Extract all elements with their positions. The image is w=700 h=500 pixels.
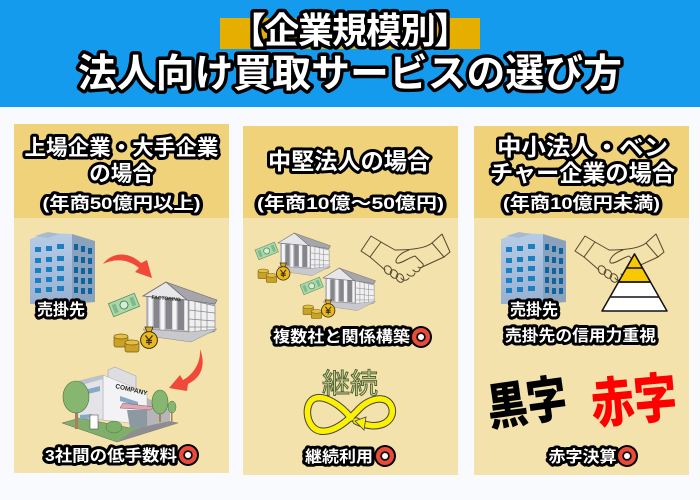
icon: double circle xyxy=(374,445,396,467)
panel heading text: 中堅法人の場合 xyxy=(268,148,430,174)
label: build relationships: 複数社と関係構築 xyxy=(273,327,410,346)
panel heading text: (年商10億〜50億円) xyxy=(257,193,444,213)
label: emphasis on client credit: 売掛先の信用力重視 xyxy=(505,326,656,345)
handwritten word: continuation: 継続 xyxy=(322,368,378,399)
icon: banknote xyxy=(108,293,140,317)
icon: factoring bank: FACTORING xyxy=(151,295,181,303)
icon: money bag xyxy=(141,327,157,348)
panel heading text xyxy=(490,134,675,213)
panel heading text: (年商50億円以上) xyxy=(42,193,200,213)
panel heading text: の場合 xyxy=(89,162,154,186)
panel heading text xyxy=(257,148,444,213)
label: continuous use: 継続利用 xyxy=(305,448,373,466)
arrow: to client company xyxy=(169,349,203,391)
illustration: company building xyxy=(62,367,178,442)
icon: infinity arrow xyxy=(307,398,392,431)
text art: profit: 黒字 xyxy=(484,370,571,437)
title line 2: 法人向け買取サービスの選び方 xyxy=(78,53,622,96)
panel heading text: (年商10億円未満) xyxy=(503,193,660,213)
illustration: company building: COMPANY xyxy=(115,383,149,397)
icon: factoring banks with money xyxy=(255,233,376,318)
label: client: 売掛先 xyxy=(510,300,558,319)
panel heading text: 上場企業・大手企業 xyxy=(24,136,218,160)
panel heading text: 中小法人・ベン xyxy=(497,134,668,160)
trees xyxy=(63,381,176,433)
icon: handshake xyxy=(361,234,450,284)
label: client: 売掛先 xyxy=(37,300,85,319)
panel: large enterprises xyxy=(14,124,229,473)
icon: coins xyxy=(114,334,139,352)
icon: double circle xyxy=(177,444,199,466)
panel heading band xyxy=(243,126,458,218)
panel heading band xyxy=(14,124,229,218)
header band xyxy=(0,0,700,107)
label: deficit accounts: 赤字決算 xyxy=(548,447,616,466)
panel heading band xyxy=(474,126,689,218)
panel: small and startup companies xyxy=(474,126,689,475)
icon: double circle xyxy=(616,445,638,467)
arrow: to factoring company xyxy=(103,254,152,278)
icon: double circle xyxy=(410,326,432,348)
icon: handshake xyxy=(575,234,664,284)
panel heading text xyxy=(24,136,218,213)
panel: mid-size companies xyxy=(243,126,458,475)
icon: client building xyxy=(501,232,566,304)
heading highlight xyxy=(220,18,480,49)
text art: deficit: 赤字 xyxy=(589,369,680,436)
label: low fee with factoring: 3社間の低手数料 xyxy=(45,446,177,465)
panel heading text: チャー企業の場合 xyxy=(490,160,675,186)
icon: credit pyramid xyxy=(602,254,667,311)
title line 1: 【企業規模別】 xyxy=(230,10,470,51)
icon: client building xyxy=(30,232,95,304)
icon: factoring bank xyxy=(143,282,217,342)
